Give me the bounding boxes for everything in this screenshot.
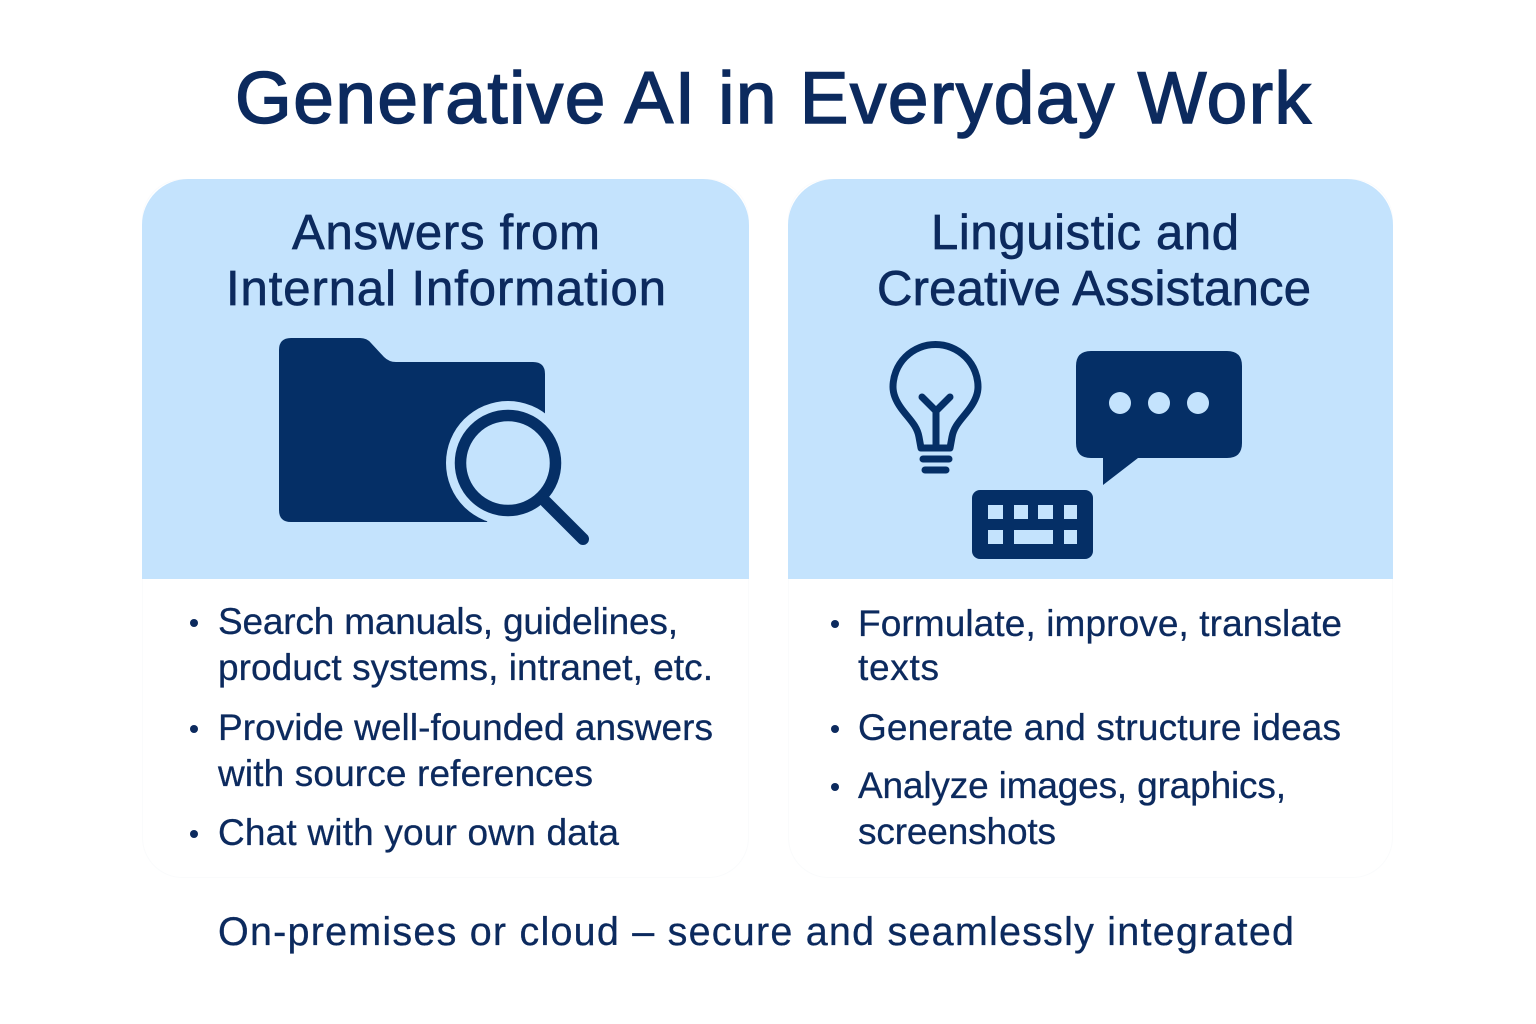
icon: folder with magnifying glass <box>279 338 583 539</box>
panel background <box>788 179 1393 579</box>
bullet list: internal information: with source references <box>217 753 593 794</box>
panel: answers from internal information <box>142 179 749 878</box>
bullet list: internal information: Chat with your own data <box>218 812 619 853</box>
panel heading: Creative Assistance <box>877 262 1311 316</box>
bullet list: creative assistance <box>831 603 1342 852</box>
panel background <box>142 179 749 579</box>
panel heading <box>226 206 666 316</box>
title: Generative AI in Everyday Work <box>235 58 1312 139</box>
panel card outline <box>142 180 748 878</box>
icon: light bulb <box>893 344 978 470</box>
bullet list: internal information: Provide well-founded answers <box>218 707 713 748</box>
panel heading <box>877 206 1311 316</box>
panel: linguistic and creative assistance <box>788 179 1393 878</box>
icon: keyboard <box>972 490 1093 559</box>
bullet list: internal information <box>190 601 713 853</box>
bullet list: internal information: product systems, intranet, etc. <box>218 647 713 688</box>
bullet list: creative assistance: Formulate, improve, translate <box>858 603 1342 644</box>
bullet list: creative assistance: texts <box>858 647 939 688</box>
bullet list: creative assistance: screenshots <box>858 811 1056 852</box>
footer statement: On-premises or cloud – secure and seamlessly integrated <box>218 910 1294 954</box>
bullet list: internal information: Search manuals, guidelines, <box>218 601 678 642</box>
panel heading: Internal Information <box>226 262 666 316</box>
icon: speech bubble <box>1076 351 1242 485</box>
panel card outline <box>788 180 1392 878</box>
bullet list: creative assistance: Generate and structure ideas <box>858 707 1341 748</box>
bullet list: creative assistance: Analyze images, graphics, <box>858 765 1286 806</box>
panel heading: Answers from <box>292 206 600 260</box>
panel heading: Linguistic and <box>931 206 1239 260</box>
